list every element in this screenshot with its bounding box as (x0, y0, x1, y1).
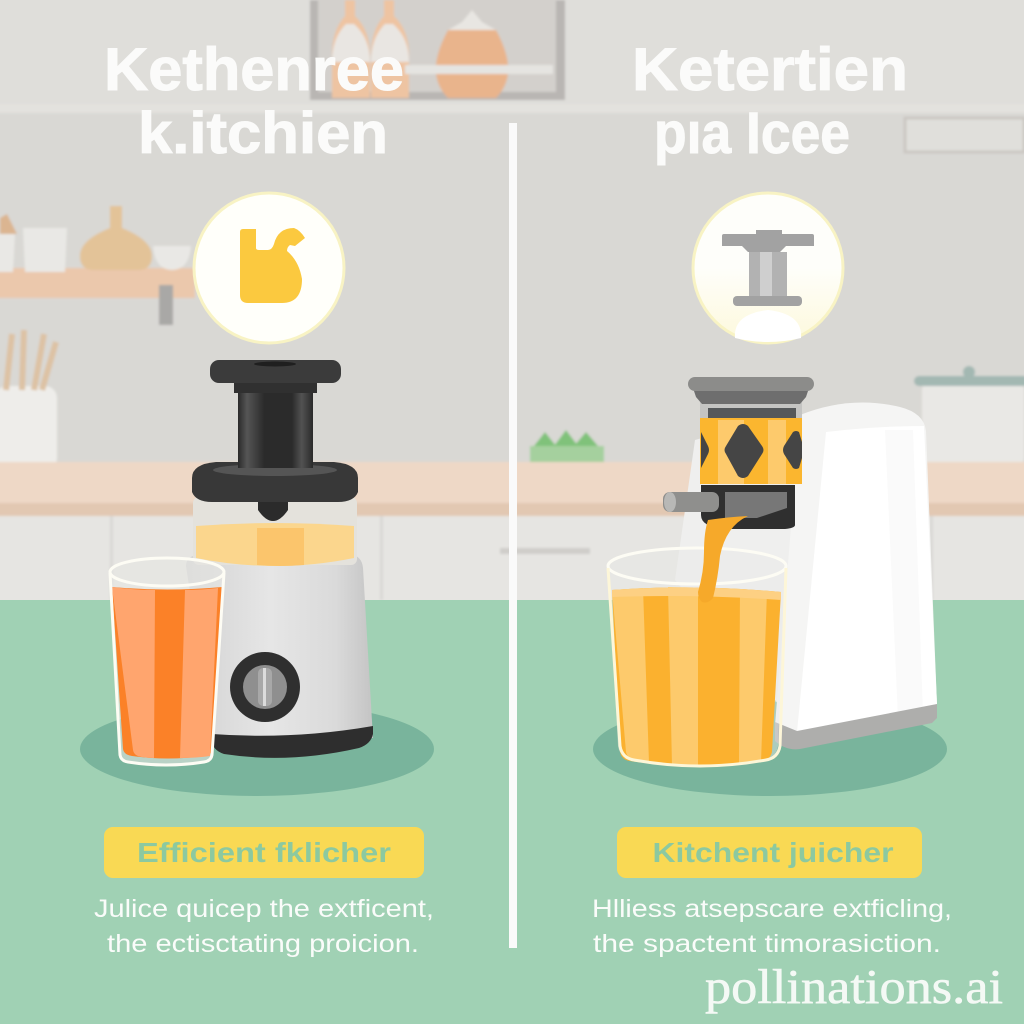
title: right: pıa Icee (654, 101, 850, 166)
left juicer (186, 360, 373, 758)
title: left: Kethenree (104, 36, 404, 103)
juice stream (698, 516, 748, 602)
orange glass (110, 558, 224, 765)
body text: left: Julice quicep the extficent, (94, 895, 434, 923)
body text: right (592, 895, 952, 958)
title: left (104, 36, 404, 166)
caption pill: right: Kitchent juicher (652, 837, 894, 868)
juicer dial (230, 652, 300, 722)
title: right: Ketertien (632, 36, 908, 103)
body text: left (94, 895, 434, 958)
yellow juice glass (608, 548, 786, 767)
caption pill: right (617, 827, 922, 878)
left shelf (0, 206, 195, 470)
title: right (632, 36, 908, 166)
shadow: right (593, 702, 947, 796)
watermark: pollinations.ai (705, 959, 1003, 1014)
title: left: k.itchien (138, 101, 388, 166)
shadow: left (80, 702, 434, 796)
right juicer (663, 377, 937, 749)
green counter (0, 600, 1024, 1024)
icon: left yellow badge (194, 193, 344, 343)
body text: right: the spactent timorasiction. (593, 930, 941, 958)
caption pill: left: Efficient fklicher (137, 837, 391, 868)
body text: left: the ectisctating proicion. (107, 930, 419, 958)
body text: right: Hlliess atsepscare extficling, (592, 895, 952, 923)
caption pill: left (104, 827, 424, 878)
center divider (509, 123, 517, 948)
icon: right grey part badge (693, 193, 843, 343)
right pot and plant (530, 366, 1024, 468)
